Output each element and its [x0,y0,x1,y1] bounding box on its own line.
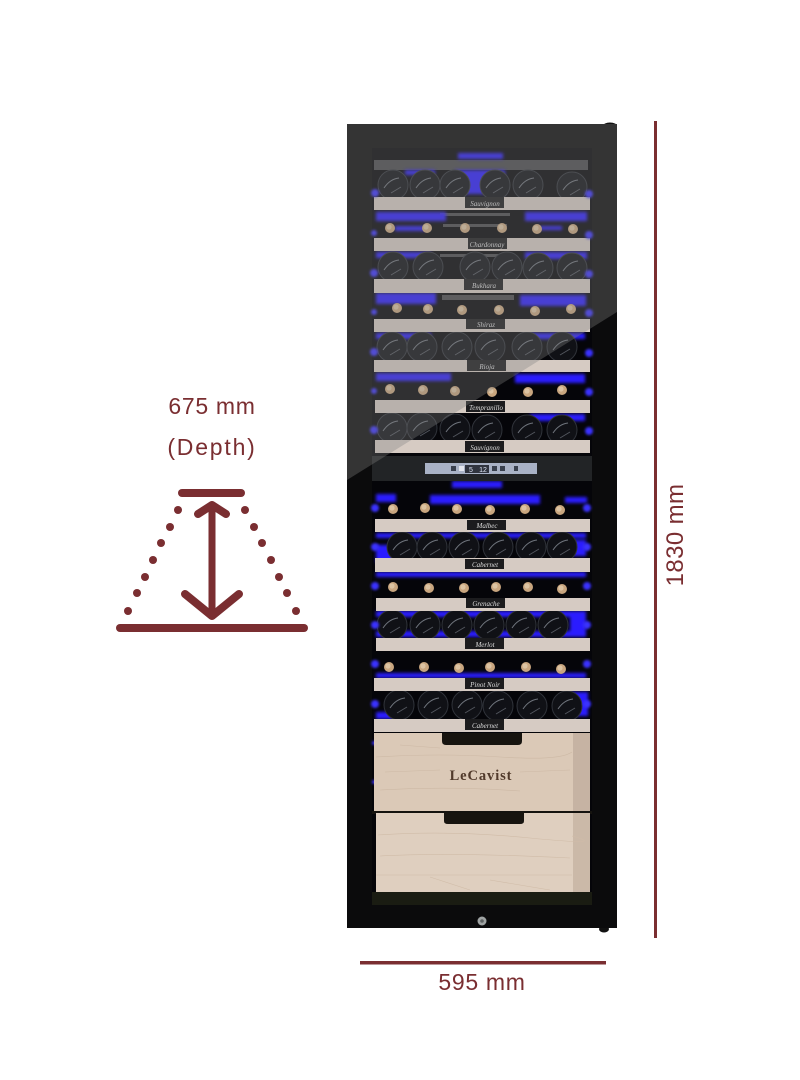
icon: depth arrow with dotted perspective [120,493,304,628]
brand logo: LeCavist [450,768,512,784]
blue interior lighting [376,153,588,719]
shelf labels: Tempranillo [469,404,503,412]
shelf labels: Rioja [478,363,495,371]
icon: door lock [478,916,486,926]
shelf labels: Pinot Noir [469,681,500,689]
shelf fronts [374,197,590,732]
cabinet frame [347,124,617,928]
shelf labels: Cabernet [472,722,499,730]
glass reflection [347,124,617,480]
interior rails [374,160,588,300]
control panel: 12 [479,467,487,474]
shelf labels: Shiraz [477,321,495,329]
shelf labels: Merlot [474,641,496,649]
shelf labels: Grenache [472,600,500,608]
control panel: 5 [469,467,473,474]
height line [654,121,657,938]
width line [360,961,606,964]
drawer: upper wood drawer with logo [374,733,590,811]
panel: depth dimension [120,393,304,628]
side LED dots [370,189,593,784]
bottle rows [377,170,587,721]
base strip [372,892,592,905]
shelf labels: Chardonnay [470,241,505,249]
shelf labels: Sauvignon [470,200,500,208]
width value: 595 mm [438,969,526,995]
shelf labels [464,197,507,730]
cabinet hinge and foot [599,122,617,932]
depth value: 675 mm [168,393,256,419]
depth caption: (Depth) [167,434,257,460]
shelf labels: Malbec [476,522,498,530]
panel: wine cabinet [347,122,617,932]
shelf labels: Sauvignon [470,444,500,452]
drawer: lower wood drawer [372,811,592,892]
height value: 1830 mm [662,484,689,586]
control panel [372,456,592,481]
cabinet interior [372,148,592,905]
height dimension [654,121,689,938]
width dimension [360,961,606,995]
shelf labels: Bukhara [472,282,497,290]
shelf labels: Cabernet [472,561,499,569]
